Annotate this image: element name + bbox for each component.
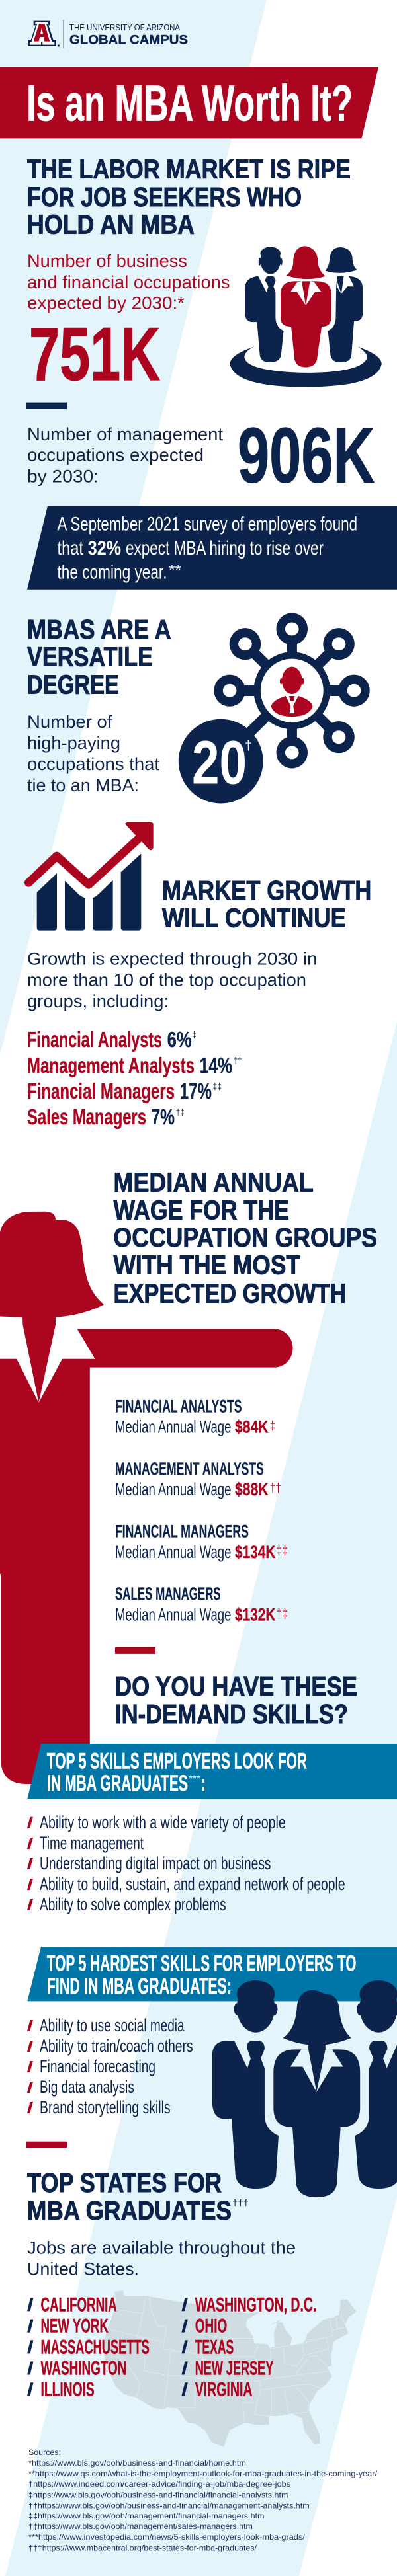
logo: University of Arizona Global Campus: THE UNIVERSITY OF ARIZONA bbox=[69, 23, 181, 32]
heading: versatile degree: DEGREE bbox=[27, 670, 119, 700]
sources: †‡https://www.bls.gov/ooh/management/sales-managers.htm bbox=[28, 2522, 253, 2531]
text: management occupations: by 2030: bbox=[27, 467, 99, 487]
list: occupation growth rates bbox=[27, 1027, 242, 1129]
list: median wages by occupation: †‡ bbox=[276, 1607, 288, 1621]
logo: University of Arizona Global Campus: GLOBAL CAMPUS bbox=[69, 34, 188, 48]
text: high-paying occupations: Number of bbox=[27, 712, 112, 732]
list: hardest skills: Big data analysis bbox=[40, 2077, 134, 2097]
heading: top states: ††† bbox=[232, 2197, 249, 2208]
list: median wages by occupation: ‡ bbox=[270, 1419, 275, 1433]
banner: top 5 skills employers look for: *** bbox=[189, 1773, 201, 1783]
sources: *https://www.bls.gov/ooh/business-and-financial/home.htm bbox=[28, 2458, 246, 2468]
heading: median annual wage: WITH THE MOST bbox=[114, 1250, 300, 1280]
sources: ‡‡https://www.bls.gov/ooh/management/financial-managers.htm bbox=[28, 2511, 264, 2520]
text: jobs throughout the United States: Jobs are available throughout the bbox=[27, 2238, 296, 2258]
heading: in-demand skills: DO YOU HAVE THESE bbox=[115, 1671, 357, 1701]
text: high-paying occupations: occupations that bbox=[27, 754, 159, 774]
list: top states: TEXAS bbox=[195, 2336, 234, 2358]
list: median wages by occupation: FINANCIAL ANALYSTS bbox=[115, 1397, 242, 1417]
list: occupation growth rates: 6% bbox=[167, 1027, 192, 1052]
list: hardest skills: Financial forecasting bbox=[40, 2056, 155, 2076]
list: top states: WASHINGTON bbox=[41, 2357, 126, 2380]
banner: top 5 hardest skills: FIND IN MBA GRADUATES: bbox=[47, 1974, 232, 1999]
heading: labor market: HOLD AN MBA bbox=[27, 210, 195, 240]
sources: †††https://www.mbacentral.org/best-states-for-mba-graduates/ bbox=[28, 2543, 257, 2552]
heading: market growth bbox=[162, 875, 371, 933]
divider dash bbox=[26, 403, 67, 409]
list: top states: OHIO bbox=[195, 2316, 227, 2337]
text: management occupations bbox=[27, 424, 223, 487]
list: top skills: Ability to solve complex problems bbox=[40, 1894, 226, 1914]
heading: market growth: WILL CONTINUE bbox=[162, 902, 346, 933]
heading: top states: MBA GRADUATES bbox=[27, 2195, 232, 2226]
icon: network with 20+ occupations bbox=[179, 613, 370, 804]
callout: survey of employers: the coming year. bbox=[57, 562, 167, 583]
heading: median annual wage: WAGE FOR THE bbox=[114, 1194, 289, 1225]
list: median wages by occupation: $88K bbox=[235, 1479, 269, 1499]
list: hardest skills: Ability to use social media bbox=[40, 2015, 185, 2035]
list: occupation growth rates: 17% bbox=[180, 1079, 212, 1103]
heading: versatile degree: VERSATILE bbox=[27, 641, 153, 672]
text: growth expected bbox=[27, 949, 318, 1011]
list: top states: WASHINGTON, D.C. bbox=[195, 2294, 316, 2316]
heading: top states bbox=[27, 2167, 249, 2226]
banner: top 5 hardest skills bbox=[27, 1947, 397, 2001]
list: top states: ILLINOIS bbox=[41, 2378, 95, 2400]
list: top skills: Time management bbox=[40, 1833, 144, 1853]
text: management occupations: Number of management bbox=[27, 424, 223, 444]
text: business and financial occupations: expected by 2030:* bbox=[27, 293, 185, 313]
list: top states: NEW JERSEY bbox=[195, 2357, 273, 2380]
list: occupation growth rates: Financial Analysts bbox=[27, 1027, 162, 1052]
text: business and financial occupations bbox=[27, 251, 230, 313]
heading: versatile degree: MBAS ARE A bbox=[27, 614, 171, 644]
banner: top 5 skills employers look for bbox=[27, 1744, 397, 1799]
logo: University of Arizona Global Campus bbox=[28, 20, 188, 48]
banner: top 5 skills employers look for: : bbox=[200, 1771, 206, 1796]
heading: median annual wage bbox=[114, 1167, 377, 1309]
text: growth expected: groups, including: bbox=[27, 992, 169, 1011]
list: median wages by occupation: Median Annual Wage bbox=[115, 1542, 231, 1562]
callout: survey of employers: expect MBA hiring to rise over bbox=[126, 537, 324, 559]
list: median wages by occupation: Median Annual Wage bbox=[115, 1417, 231, 1437]
list: median wages by occupation: FINANCIAL MANAGERS bbox=[115, 1522, 249, 1542]
list: median wages by occupation: Median Annual Wage bbox=[115, 1605, 231, 1625]
list: hardest skills: Brand storytelling skills bbox=[40, 2097, 171, 2117]
list: median wages by occupation: Median Annual Wage bbox=[115, 1479, 231, 1499]
heading: median annual wage: EXPECTED GROWTH bbox=[114, 1278, 347, 1309]
list: top states: CALIFORNIA bbox=[41, 2294, 117, 2316]
text: high-paying occupations: tie to an MBA: bbox=[27, 775, 139, 795]
list: occupation growth rates: Financial Managers bbox=[27, 1079, 175, 1103]
divider dash red bbox=[26, 2142, 67, 2148]
callout: survey of employers: 32% bbox=[88, 537, 121, 559]
text: business and financial occupations: and financial occupations bbox=[27, 272, 230, 292]
list: occupation growth rates: 14% bbox=[200, 1053, 232, 1077]
illustration: navy business people silhouettes bbox=[212, 1980, 397, 2197]
divider dash red bbox=[115, 1647, 155, 1654]
list: occupation growth rates: ‡ bbox=[192, 1029, 197, 1040]
sources: †https://www.indeed.com/career-advice/finding-a-job/mba-degree-jobs bbox=[28, 2479, 290, 2489]
list: median wages by occupation: †† bbox=[270, 1481, 281, 1495]
callout: survey of employers: that bbox=[57, 537, 84, 559]
list: median wages by occupation bbox=[115, 1397, 288, 1625]
list: median wages by occupation: SALES MANAGERS bbox=[115, 1584, 221, 1604]
text: business and financial occupations: Number of business bbox=[27, 251, 187, 271]
list: top skills bbox=[27, 1813, 345, 1914]
list: median wages by occupation: $132K bbox=[235, 1605, 276, 1625]
list: hardest skills: Ability to train/coach others bbox=[40, 2036, 193, 2056]
icon: three business people on a ring bbox=[230, 246, 382, 387]
text: jobs throughout the United States: United States. bbox=[27, 2259, 139, 2279]
stat: 751K: 751K bbox=[29, 313, 160, 397]
heading: median annual wage: MEDIAN ANNUAL bbox=[114, 1167, 314, 1198]
text: jobs throughout the United States bbox=[27, 2238, 296, 2279]
heading: top states: TOP STATES FOR bbox=[27, 2167, 222, 2198]
sources: ‡https://www.bls.gov/ooh/business-and-financial/financial-analysts.htm bbox=[28, 2490, 288, 2499]
sources: **https://www.qs.com/what-is-the-employment-outlook-for-mba-graduates-in-the-coming-year/ bbox=[28, 2469, 378, 2478]
list: median wages by occupation: MANAGEMENT ANALYSTS bbox=[115, 1459, 264, 1479]
list: occupation growth rates: 7% bbox=[151, 1105, 175, 1129]
list: occupation growth rates: †‡ bbox=[176, 1107, 185, 1117]
text: high-paying occupations: high-paying bbox=[27, 733, 120, 753]
list: occupation growth rates: Sales Managers bbox=[27, 1105, 146, 1129]
sources: Sources: bbox=[28, 2448, 61, 2457]
icon: network with 20+ occupations: † bbox=[245, 739, 252, 753]
icon: network with 20+ occupations: 20 bbox=[192, 728, 247, 797]
heading: in-demand skills: IN-DEMAND SKILLS? bbox=[115, 1699, 348, 1729]
list: top states: NEW YORK bbox=[41, 2316, 109, 2337]
sources: ††https://www.bls.gov/ooh/business-and-financial/management-analysts.htm bbox=[28, 2501, 310, 2510]
map: United States bbox=[104, 2290, 356, 2447]
list: occupation growth rates: ‡‡ bbox=[213, 1081, 222, 1091]
list: median wages by occupation: ‡‡ bbox=[276, 1544, 288, 1558]
list: top skills: Understanding digital impact on business bbox=[40, 1854, 271, 1873]
list: median wages by occupation: $84K bbox=[235, 1417, 269, 1437]
text: management occupations: occupations expected bbox=[27, 446, 204, 465]
sources: ***https://www.investopedia.com/news/5-skills-employers-look-mba-grads/ bbox=[28, 2532, 306, 2542]
list: top states: MASSACHUSETTS bbox=[41, 2336, 150, 2358]
list: hardest skills bbox=[27, 2015, 193, 2117]
heading: labor market bbox=[27, 153, 351, 240]
callout: survey of employers bbox=[27, 506, 397, 590]
list: occupation growth rates: Management Analysts bbox=[27, 1053, 195, 1077]
sources bbox=[28, 2448, 378, 2552]
list: top states: VIRGINIA bbox=[195, 2378, 253, 2400]
callout: survey of employers: ** bbox=[169, 563, 181, 578]
list: top skills: Ability to work with a wide variety of people bbox=[40, 1813, 286, 1832]
list: occupation growth rates: †† bbox=[234, 1055, 242, 1066]
heading: in-demand skills bbox=[115, 1671, 357, 1729]
heading: versatile degree bbox=[27, 614, 171, 700]
heading: labor market: FOR JOB SEEKERS WHO bbox=[27, 182, 302, 212]
illustration: large red woman figure pointing arm bbox=[0, 1212, 293, 1784]
text: growth expected: Growth is expected through 2030 in bbox=[27, 949, 318, 969]
list: median wages by occupation: $134K bbox=[235, 1542, 276, 1562]
banner: top 5 skills employers look for: IN MBA GRADUATES bbox=[47, 1771, 188, 1796]
text: growth expected: more than 10 of the top occupation bbox=[27, 970, 306, 990]
list: top states bbox=[27, 2294, 316, 2400]
icon: bar chart with rising arrow bbox=[28, 822, 154, 931]
text: high-paying occupations bbox=[27, 712, 159, 795]
